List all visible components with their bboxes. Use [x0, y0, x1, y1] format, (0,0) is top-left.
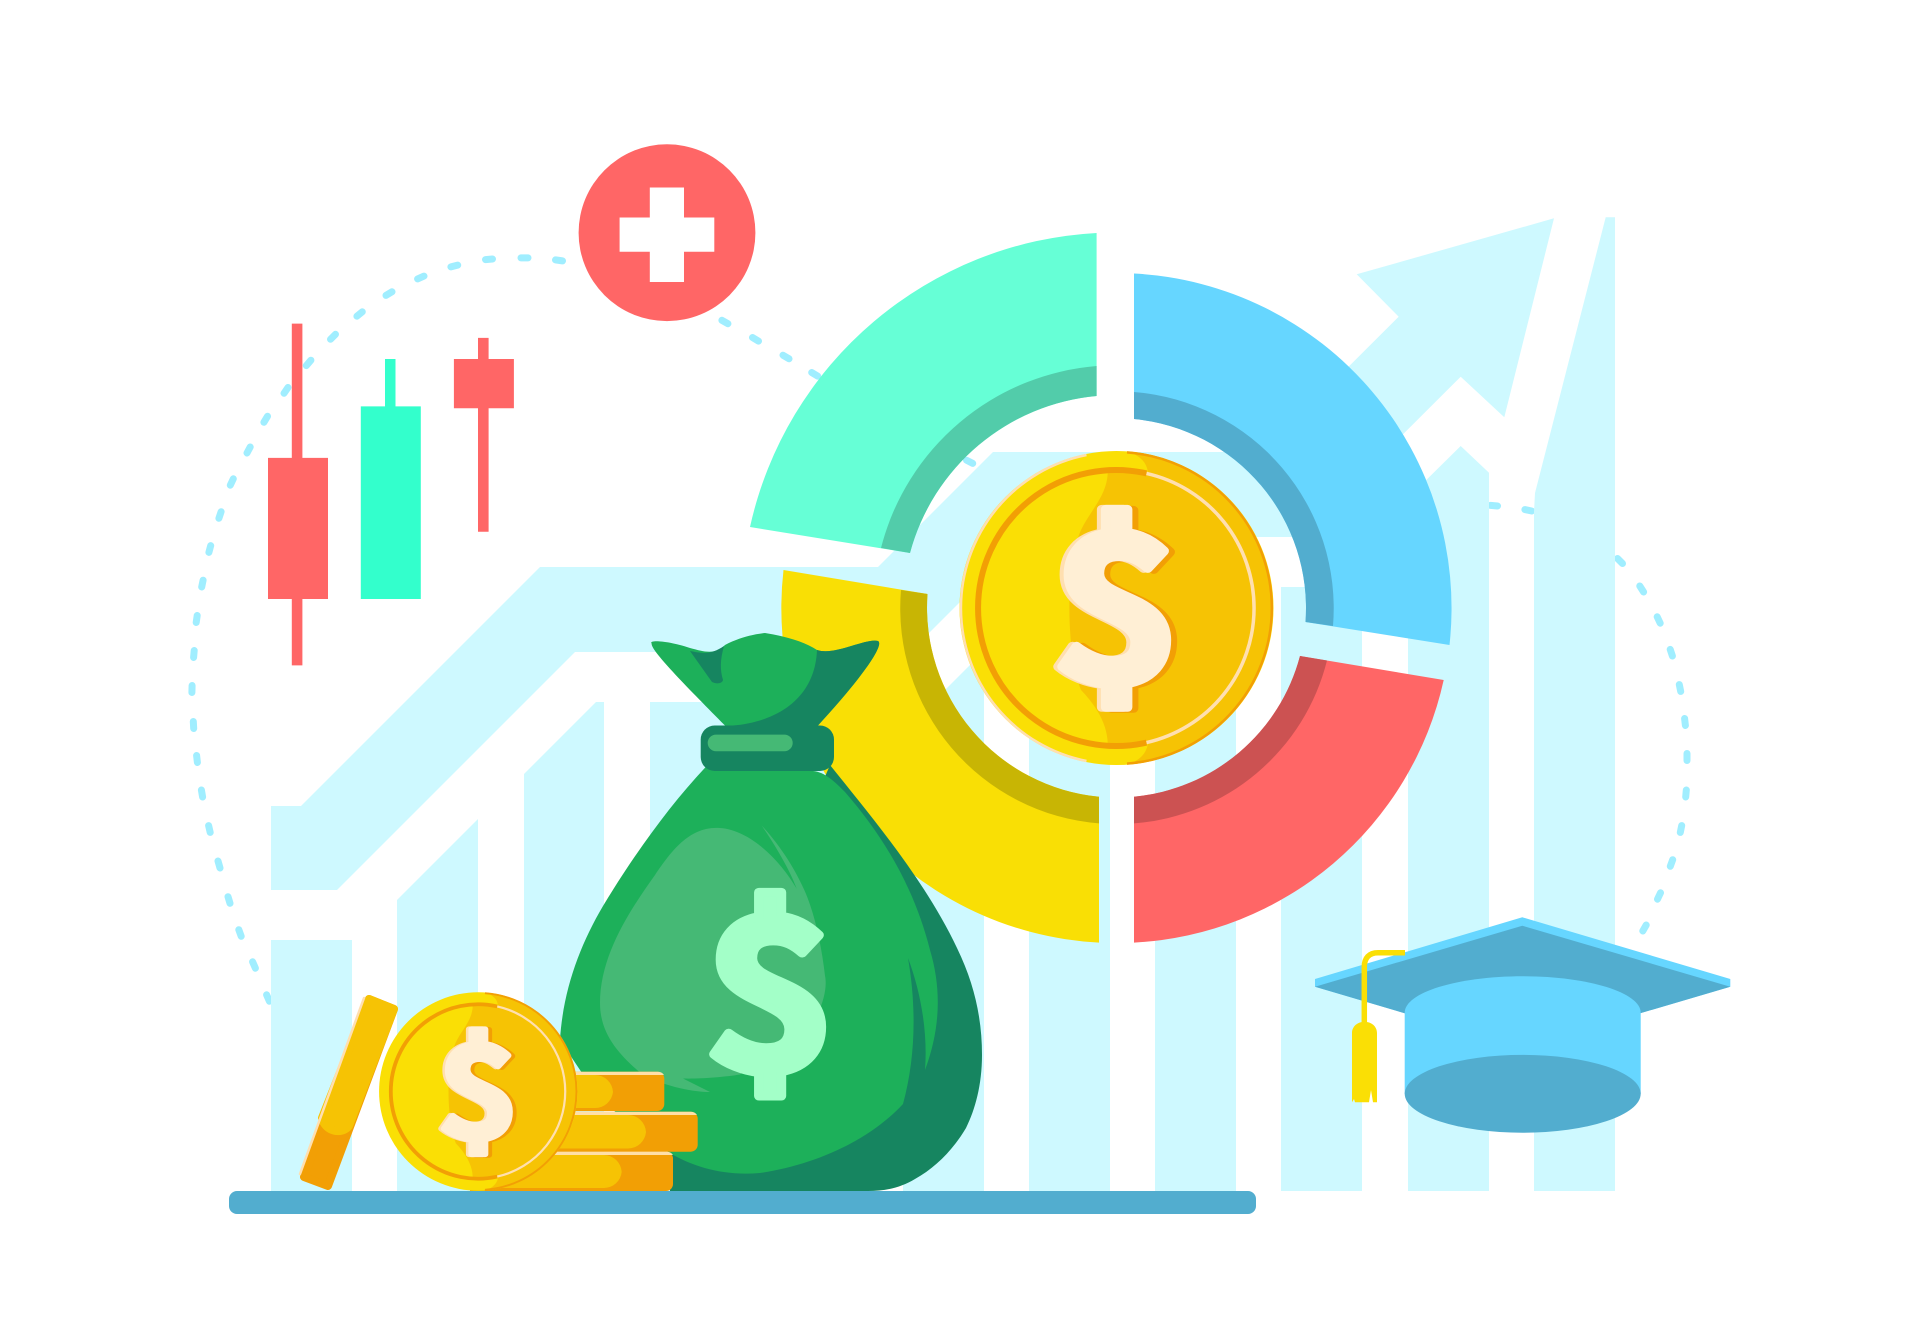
green candle middle [361, 359, 421, 599]
ground shelf [229, 1191, 1256, 1214]
bag highlight patch [600, 826, 826, 1092]
coin stack [470, 1072, 698, 1191]
frill shadow right [733, 641, 879, 726]
stack coin top [520, 1072, 664, 1111]
large gold coin [960, 447, 1274, 765]
bag body [560, 767, 938, 1174]
icon: red plus badge [579, 144, 755, 321]
money bag [560, 633, 982, 1191]
large gold coin: $ [1048, 447, 1177, 742]
cap underside [1405, 1055, 1641, 1133]
candlestick chart [268, 324, 514, 665]
background rising arrow [271, 218, 1554, 890]
donut chart [750, 233, 1452, 943]
frill fold left [690, 646, 724, 683]
stack coin bottom [470, 1152, 673, 1191]
red candle right [454, 338, 514, 532]
bag frill [651, 633, 879, 726]
red candle left [268, 324, 328, 665]
tassel [1352, 1022, 1377, 1102]
small gold coin: $ [441, 989, 523, 1176]
large gold coin: $ [1052, 447, 1181, 742]
stack coin middle [510, 1112, 698, 1152]
cap cylinder [1405, 976, 1641, 1094]
background growth chart [271, 217, 1615, 1191]
bag body shadow [670, 765, 982, 1191]
segment: blue [1134, 274, 1452, 645]
bag dollar sign: $ [703, 826, 837, 1131]
bag collar [701, 726, 834, 771]
tassel cord [1364, 953, 1405, 1024]
cap board [1315, 917, 1730, 1048]
small gold coin [379, 988, 578, 1191]
large gold coin: $ [1058, 448, 1187, 743]
small gold coin: $ [437, 988, 519, 1176]
background bars [271, 217, 1615, 1191]
dotted orbit path [192, 258, 1687, 1001]
segment: red [1134, 656, 1444, 943]
segment: teal [750, 233, 1097, 553]
graduation cap [1315, 917, 1730, 1133]
tilted coin edge [300, 998, 394, 1186]
segment: yellow [781, 570, 1099, 943]
collar highlight [708, 735, 793, 751]
small gold coin: $ [435, 988, 517, 1176]
